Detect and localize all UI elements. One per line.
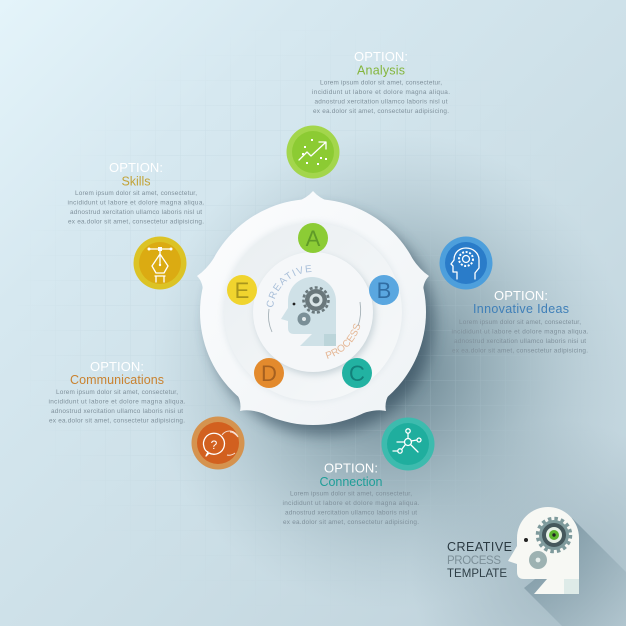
analysis text: incididunt ut labore et dolore magna aliqua. bbox=[312, 89, 450, 96]
badge E bbox=[227, 275, 257, 305]
template title: PROCESS bbox=[447, 555, 501, 567]
skills text: Lorem ipsum dolor sit amet, consectetur, bbox=[75, 190, 197, 197]
connection text: adnostrud xercitation ullamco laboris nisl ut bbox=[285, 510, 417, 516]
option: innovative ideas bbox=[440, 236, 589, 354]
communications text: Lorem ipsum dolor sit amet, consectetur, bbox=[56, 389, 178, 396]
skills heading: OPTION: bbox=[109, 160, 163, 175]
innovative ideas text bbox=[452, 319, 589, 354]
connection heading: OPTION: bbox=[324, 460, 378, 476]
innovative ideas text: Lorem ipsum dolor sit amet, consectetur, bbox=[459, 319, 581, 326]
badge E: E bbox=[235, 278, 249, 303]
connection text: ex ea.dolor sit amet, consectetur adipisicing. bbox=[283, 519, 419, 526]
innovative ideas text: ex ea.dolor sit amet, consectetur adipisicing. bbox=[452, 348, 588, 354]
communications text: adnostrud xercitation ullamco laboris nisi ut bbox=[51, 408, 183, 415]
title block with head bbox=[447, 507, 626, 626]
analysis heading: OPTION: bbox=[354, 49, 408, 64]
wheel outer disc with five points bbox=[197, 191, 429, 425]
innovative ideas text: incididunt ut labore et dolore magna aliqua. bbox=[452, 328, 589, 336]
analysis icon bbox=[286, 126, 340, 178]
connection text: Lorem ipsum dolor sit amet, consectetur, bbox=[290, 490, 412, 498]
innovative ideas heading: OPTION: bbox=[494, 288, 548, 303]
curved label: creative: CREATIVE bbox=[266, 265, 312, 307]
long shadow bbox=[524, 518, 626, 626]
skills text bbox=[68, 190, 205, 226]
skills text: incididunt ut labore et dolore magna aliqua. bbox=[68, 200, 205, 206]
skills text: ex ea.dolor sit amet, consectetur adipisicing. bbox=[68, 218, 204, 226]
inner ring bbox=[223, 222, 403, 402]
analysis text: Lorem ipsum dolor sit amet, consectetur, bbox=[320, 80, 442, 86]
connection icon bbox=[382, 418, 434, 470]
skills subheading: Skills bbox=[122, 174, 150, 188]
analysis text: ex ea.dolor sit amet, consectetur adipisicing. bbox=[313, 108, 449, 115]
option: communications bbox=[48, 359, 244, 470]
option: skills bbox=[68, 160, 205, 290]
communications text: ex ea.dolor sit amet, consectetur adipisicing. bbox=[49, 418, 185, 424]
connection subheading: Connection bbox=[320, 475, 383, 489]
badge D: D bbox=[261, 361, 277, 386]
centre disc bbox=[253, 252, 375, 375]
innovative ideas subheading: Innovative Ideas bbox=[473, 302, 569, 316]
analysis text: adnostrud xercitation ullamco laboris nisl ut bbox=[314, 98, 448, 106]
badge C: C bbox=[349, 361, 365, 386]
curved accents bbox=[268, 302, 361, 332]
communications icon bbox=[192, 416, 244, 470]
curved label: process: PROCESS bbox=[326, 324, 360, 359]
option: connection bbox=[282, 418, 434, 526]
communications text: incididunt ut labore et dolore magna aliqua. bbox=[48, 398, 186, 406]
connection text: incididunt ut labore et dolore magna aliqua. bbox=[282, 500, 420, 507]
badge A: A bbox=[306, 226, 321, 251]
badge C bbox=[342, 358, 372, 388]
analysis subheading: Analysis bbox=[357, 64, 405, 78]
template title: CREATIVE bbox=[447, 540, 512, 554]
communications heading: OPTION: bbox=[90, 359, 144, 374]
badge D bbox=[254, 358, 284, 388]
badge B bbox=[369, 275, 399, 305]
connection text bbox=[282, 490, 420, 526]
communications subheading: Communications bbox=[70, 373, 164, 387]
main wheel bbox=[197, 191, 442, 442]
centre head icon bbox=[281, 277, 336, 346]
option: analysis bbox=[286, 49, 450, 178]
template title: TEMPLATE bbox=[447, 568, 507, 580]
template title bbox=[447, 540, 512, 580]
analysis text bbox=[312, 80, 450, 115]
large head icon bbox=[508, 507, 579, 594]
badge A bbox=[298, 223, 328, 253]
communications text bbox=[48, 389, 186, 424]
communications icon: ? bbox=[211, 438, 218, 452]
skills text: adnostrud xercitation ullamco laboris nisl ut bbox=[70, 209, 202, 216]
badge B: B bbox=[377, 278, 391, 303]
skills icon bbox=[134, 236, 186, 290]
innovative ideas text: adnostrud xercitation ullamco laboris nisi ut bbox=[454, 338, 586, 345]
innovative ideas icon bbox=[440, 236, 492, 290]
